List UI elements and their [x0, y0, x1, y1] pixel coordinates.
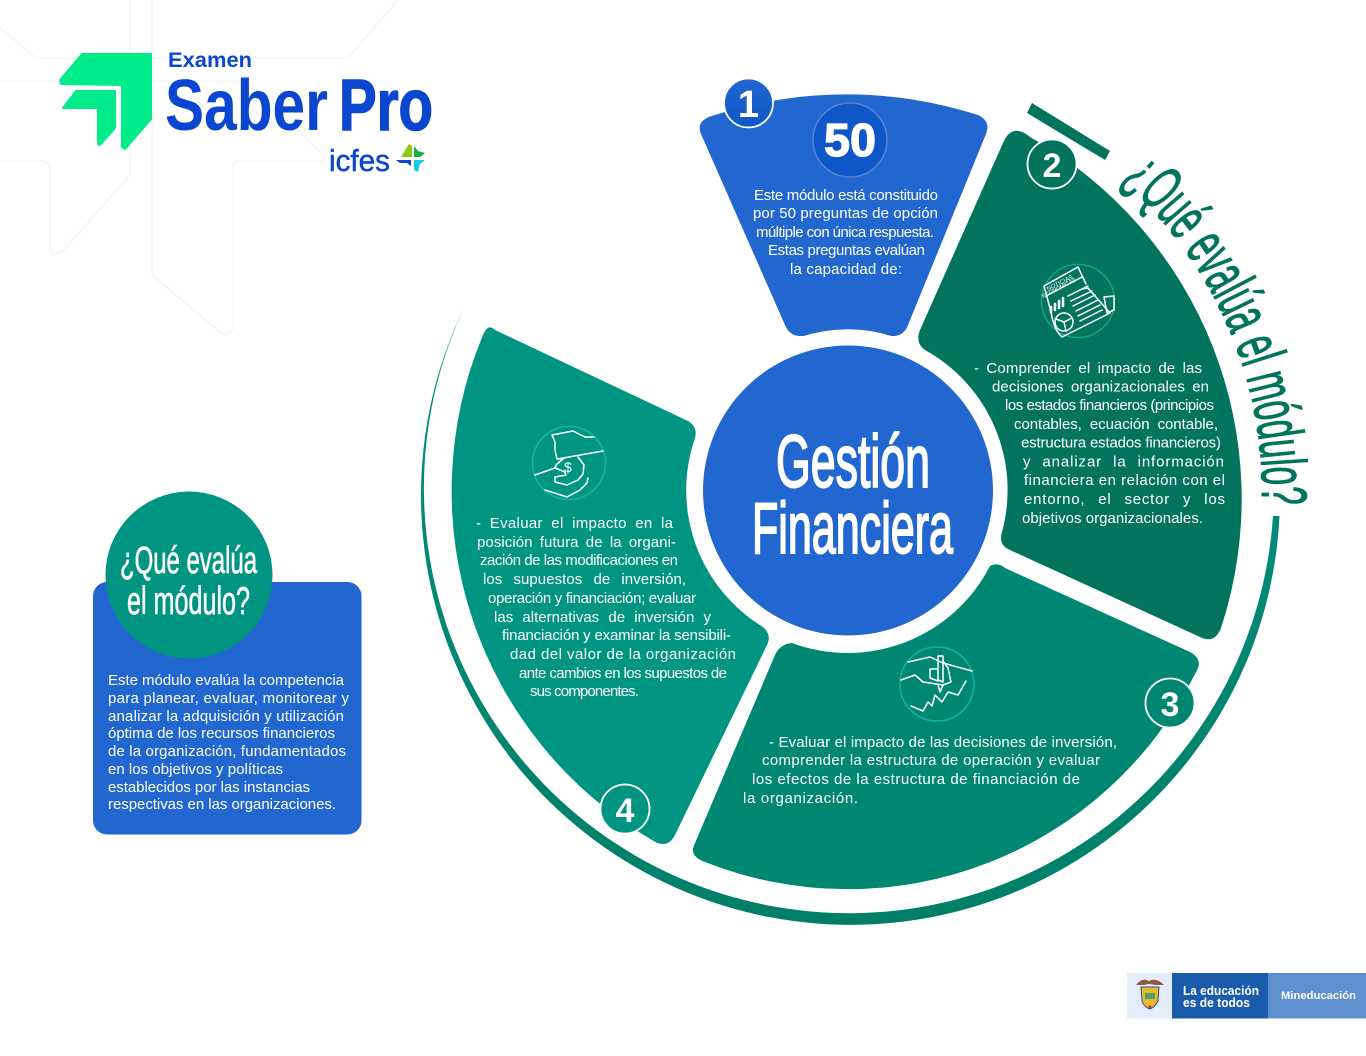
text: segment 2 description: contables, ecuación contable, [1014, 416, 1218, 433]
text: module description: respectivas en las organizaciones. [108, 796, 336, 813]
text: Saber: Saber [165, 66, 328, 146]
text: module description: establecidos por las instancias [108, 779, 310, 796]
text: segment 1 description: la capacidad de: [790, 261, 902, 278]
curved heading: ¿Qué evalúa el módulo?: ¿Qué evalúa el módulo? [1119, 160, 1308, 504]
badge 1: 1 [738, 84, 759, 126]
text: segment 3 description: los efectos de la estructura de financiación de [752, 771, 1080, 788]
text: module description: en los objetivos y políticas [108, 761, 283, 778]
icon: hand drawing chart [900, 647, 974, 721]
central circle: Gestión Financiera [703, 346, 993, 636]
icon: 50 questions circle [813, 103, 887, 177]
text: module description: analizar la adquisición y utilización [108, 708, 344, 725]
text: segment 3 description: - Evaluar el impacto de las decisiones de inversión, [769, 734, 1117, 751]
footer: Mineducación logo: La educación [1183, 984, 1259, 998]
text: segment 2 description [974, 360, 1225, 527]
text: segment 2 description: - Comprender el impacto de las [974, 360, 1202, 377]
panel: segment 2 [918, 131, 1242, 639]
text: module description: Este módulo evalúa la competencia [108, 672, 345, 689]
text: segment 2 description: estructura estados financieros) [1021, 434, 1221, 452]
text: segment 2 description: entorno, el sector y los [1024, 491, 1225, 508]
icon: newspaper [1041, 264, 1114, 338]
text: segment 2 description: financiera en relación con el [1024, 472, 1225, 489]
heading circle [106, 492, 272, 658]
text: segment 1 description: Estas preguntas evalúan [768, 242, 925, 259]
icon: 50 questions circle: 50 [824, 114, 876, 166]
panel: segment 1 [700, 94, 987, 337]
text: segment 4 description: las alternativas de inversión y [494, 609, 712, 626]
heading circle: el módulo? [127, 580, 250, 623]
text: module description [108, 672, 350, 813]
logo: Examen Saber Pro icfes [60, 49, 433, 178]
icon: newspaper: ECONÓMICAS [1041, 276, 1078, 300]
accent bar at top of ring [1027, 103, 1110, 160]
central circle: Gestión Financiera: Financiera [752, 489, 954, 569]
panel: segment 4 [452, 327, 769, 844]
icon: coat of arms [1136, 980, 1164, 1009]
text: Pro: Pro [339, 66, 433, 146]
footer: Mineducación logo [1127, 973, 1366, 1018]
text: segment 4 description: ante cambios en los supuestos de [519, 665, 727, 682]
text: icfes: icfes [329, 143, 390, 178]
icon: green arrows [60, 54, 151, 149]
panel: left info card [93, 492, 362, 834]
text: segment 2 description: decisiones organizacionales en [992, 378, 1209, 396]
outer tapered ring [421, 308, 1280, 925]
footer: Mineducación logo: es de todos [1183, 996, 1250, 1010]
footer: Mineducación logo: Mineducación [1281, 990, 1356, 1002]
badge 2: 2 [1043, 147, 1061, 185]
text: segment 4 description: posición futura de la organi- [477, 534, 676, 551]
text: segment 2 description: y analizar la información [1023, 454, 1224, 470]
text: segment 4 description: financiación y examinar la sensibili- [502, 627, 731, 644]
badge 4: 4 [616, 792, 635, 830]
panel: segment 3 [693, 564, 1199, 889]
text: segment 4 description: - Evaluar el impacto en la [476, 515, 674, 532]
text: Examen: Examen [168, 49, 252, 72]
badge 3 [1146, 678, 1194, 728]
text: segment 4 description: operación y financiación; evaluar [488, 590, 696, 607]
text: segment 2 description: los estados financieros (principios [1005, 397, 1214, 414]
text: segment 4 description: dad del valor de la organización [510, 646, 736, 663]
text: segment 3 description [743, 734, 1117, 807]
text: segment 3 description: la organización. [743, 790, 858, 807]
text: module description: para planear, evaluar, monitorear y [108, 690, 350, 707]
text: segment 1 description: múltiple con única respuesta. [756, 224, 934, 241]
text: segment 2 description: objetivos organizacionales. [1022, 510, 1203, 527]
heading circle: ¿Qué evalúa [120, 540, 258, 582]
text: segment 3 description: comprender la estructura de operación y evaluar [762, 752, 1100, 769]
text: module description: de la organización, fundamentados [108, 743, 346, 760]
text: module description: óptima de los recursos financieros [108, 725, 335, 742]
icon: hands and money: $ [564, 459, 572, 475]
badge 1 [724, 78, 773, 128]
text: segment 4 description: los supuestos de inversión, [483, 571, 686, 588]
text: segment 4 description [476, 515, 736, 700]
badge 3: 3 [1161, 686, 1179, 724]
icon: hands and money [532, 426, 606, 500]
text: segment 1 description [753, 187, 938, 278]
text: segment 1 description: por 50 preguntas de opción [753, 205, 938, 222]
icon: icfes star [396, 144, 425, 172]
text: segment 4 description: sus componentes. [530, 683, 639, 700]
badge 4 [600, 784, 650, 834]
text: segment 4 description: zación de las modificaciones en [480, 552, 678, 569]
central circle: Gestión Financiera: Gestión [776, 420, 930, 503]
icon: newspaper: NOTICIAS [1046, 275, 1074, 293]
badge 2 [1028, 140, 1076, 188]
text: segment 1 description: Este módulo está constituido [754, 187, 938, 204]
